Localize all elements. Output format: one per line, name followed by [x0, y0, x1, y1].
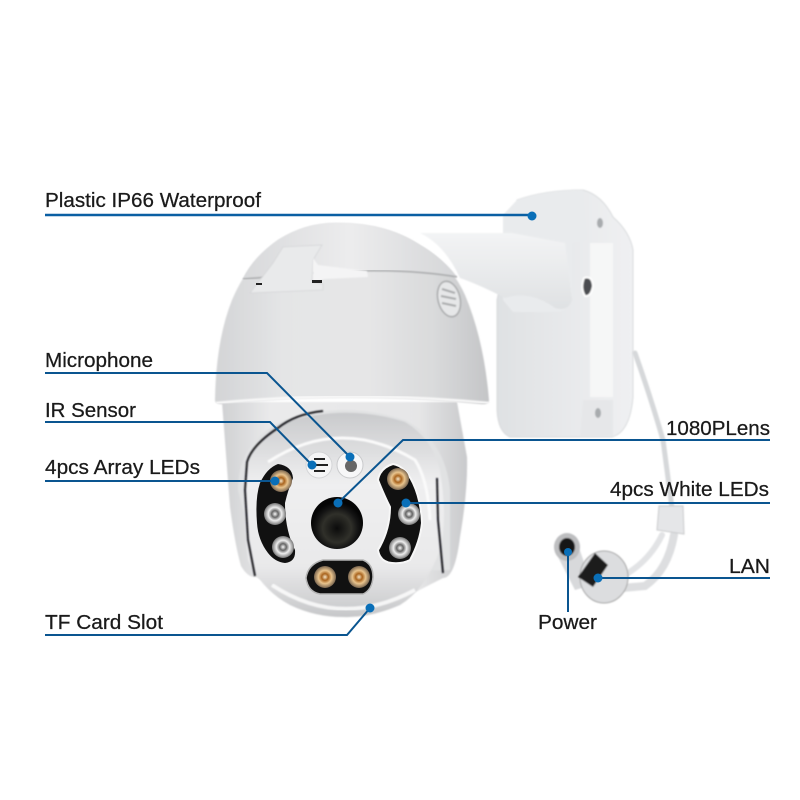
- lens: [311, 497, 363, 549]
- camera dome: [215, 223, 489, 404]
- callout: LAN: LAN: [729, 556, 770, 578]
- mount lower tab: [580, 400, 613, 436]
- gold LED left: [270, 470, 292, 492]
- mount top block: [503, 190, 588, 312]
- callout: LAN: [594, 556, 770, 582]
- right LED housing: [378, 464, 422, 563]
- camera: [215, 223, 489, 617]
- hatch slot: [313, 258, 368, 282]
- callout: IR Sensor: IR Sensor: [45, 400, 136, 422]
- callout: IR Sensor: [45, 400, 316, 470]
- dome bottom rim: [216, 396, 489, 403]
- power connector: [554, 533, 592, 590]
- bottom LED housing: [306, 560, 373, 594]
- face highlight: [272, 585, 415, 609]
- camera face plate: [245, 413, 444, 617]
- hatch: [250, 245, 323, 293]
- mount screw holes: [597, 218, 603, 228]
- silver LED left middle: [264, 503, 286, 525]
- gold LED bottom right: [348, 566, 370, 588]
- dome top cap: [243, 223, 457, 279]
- cable boot: [657, 506, 684, 534]
- mount back plate: [497, 190, 633, 437]
- callout: 4pcs White LEDs: 4pcs White LEDs: [610, 479, 769, 501]
- silver LED right lower: [389, 537, 411, 559]
- cable: [622, 353, 684, 588]
- mount side rail: [590, 243, 613, 397]
- callout: Plastic IP66 Waterproof: [45, 190, 536, 220]
- upper face ring: [238, 410, 450, 575]
- callout: 4pcs White LEDs: [402, 479, 770, 508]
- microphone: [337, 452, 363, 478]
- callout: TF Card Slot: [45, 604, 374, 635]
- dome seam: [243, 271, 457, 279]
- camera lower body: [222, 402, 467, 600]
- callout: 4pcs Array LEDs: [45, 457, 280, 486]
- dark side seams: [245, 411, 443, 576]
- silver LED left lower: [272, 536, 294, 558]
- callout: Plastic IP66 Waterproof: Plastic IP66 Waterproof: [45, 190, 261, 212]
- callout: TF Card Slot: TF Card Slot: [45, 612, 163, 634]
- left LED housing: [256, 464, 295, 563]
- inner face arc: [268, 438, 430, 520]
- gold LED bottom left: [314, 566, 336, 588]
- IR sensor: [306, 452, 332, 478]
- hatch notch: [256, 280, 322, 285]
- mount arm: [420, 233, 572, 309]
- callout: Power: Power: [538, 612, 597, 634]
- gold LED right: [387, 468, 409, 490]
- callout: 1080PLens: [334, 418, 770, 508]
- callout: Microphone: [45, 350, 354, 462]
- dome vent: [434, 279, 464, 319]
- callout: 1080PLens: 1080PLens: [666, 418, 770, 440]
- callout: Microphone: Microphone: [45, 350, 153, 372]
- silver LED right middle: [398, 503, 420, 525]
- LAN connector: [578, 551, 628, 603]
- wall mount bracket: [420, 190, 633, 437]
- callout: Power: [538, 548, 597, 634]
- callout: 4pcs Array LEDs: 4pcs Array LEDs: [45, 457, 200, 479]
